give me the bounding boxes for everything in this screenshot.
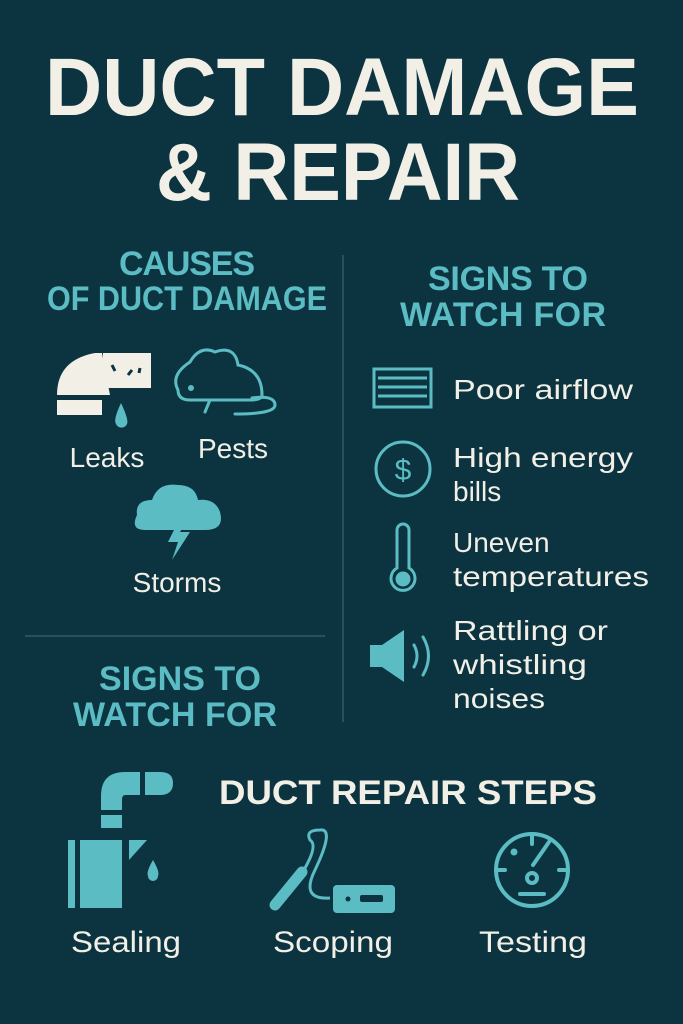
heading: signs right	[400, 260, 606, 334]
icon: scoping	[275, 830, 395, 913]
text: uneven temperatures: temperatures	[453, 561, 649, 592]
heading: repair steps: DUCT REPAIR STEPS	[219, 774, 597, 812]
icon: vent	[374, 369, 431, 407]
label: pests: Pests	[198, 433, 268, 464]
title: & REPAIR	[156, 127, 520, 218]
text: poor airflow: Poor airflow	[453, 374, 634, 405]
icon: gauge	[496, 834, 568, 906]
icon: speaker	[370, 630, 428, 682]
heading: signs right: SIGNS TO	[428, 260, 588, 298]
label: scoping: Scoping	[273, 926, 393, 959]
icon: sealing	[68, 772, 173, 908]
heading: causes: CAUSES	[119, 245, 255, 283]
icon: dollar: $	[395, 454, 412, 487]
heading: causes: OF DUCT DAMAGE	[47, 280, 327, 318]
text: noises: Rattling or	[453, 615, 608, 646]
heading: causes	[47, 245, 327, 318]
text: high energy bills: bills	[453, 476, 501, 507]
icon: pests	[176, 350, 275, 414]
icon: thermometer	[391, 524, 415, 590]
heading: signs left: SIGNS TO	[99, 660, 261, 698]
text: high energy bills: High energy	[453, 442, 633, 473]
text: uneven temperatures: Uneven	[453, 527, 550, 558]
icon: storm cloud	[135, 485, 221, 560]
heading: signs left: WATCH FOR	[73, 696, 277, 734]
label: leaks: Leaks	[70, 442, 144, 473]
text: noises: noises	[453, 683, 545, 714]
label: storms: Storms	[133, 567, 221, 598]
icon: dollar	[376, 442, 430, 496]
heading: signs right: WATCH FOR	[400, 296, 606, 334]
icon: leaks	[57, 353, 151, 428]
title	[45, 42, 639, 218]
text: noises: whistling	[452, 649, 587, 680]
label: sealing: Sealing	[71, 926, 181, 959]
label: testing: Testing	[479, 926, 587, 959]
title: DUCT DAMAGE	[45, 42, 639, 133]
heading: signs left	[73, 660, 277, 734]
